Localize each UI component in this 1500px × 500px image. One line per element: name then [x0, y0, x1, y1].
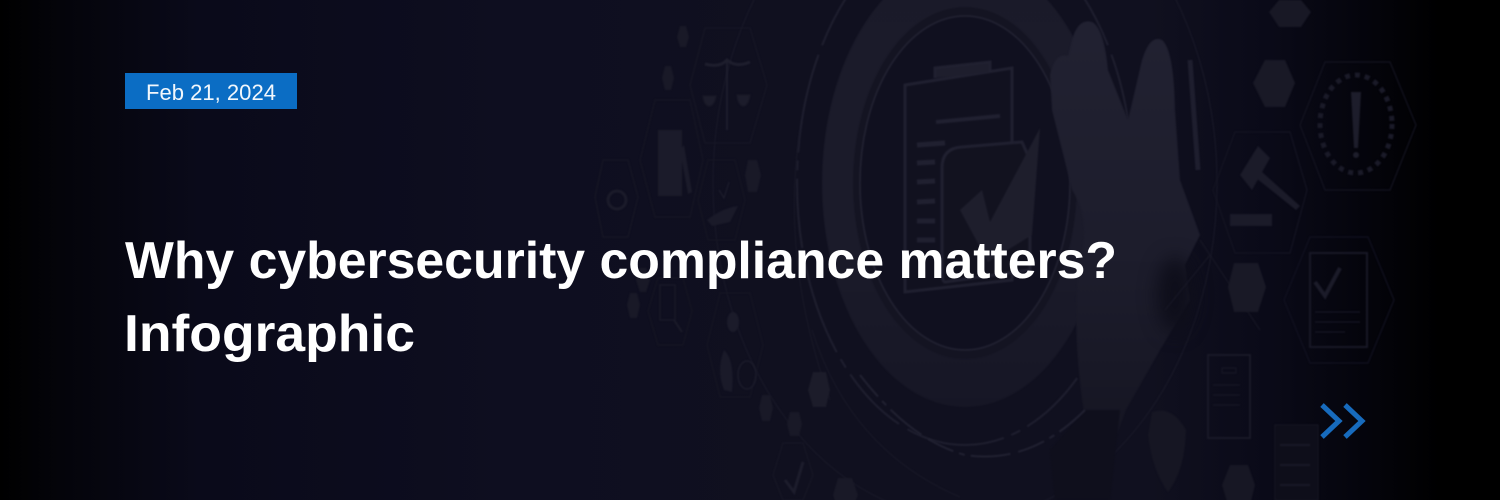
shadow on the hand [1157, 257, 1193, 333]
icon: gavel [1213, 132, 1307, 253]
date badge: Feb 21, 2024 [146, 80, 276, 105]
icon: double chevron arrow [1322, 405, 1362, 437]
icon: clipboard with check mark [905, 62, 1040, 292]
icon: head with question mark [1148, 410, 1186, 492]
icon: document [1208, 355, 1250, 438]
background: central rings [713, 0, 1217, 500]
icon group: right hexagon icons [1148, 0, 1416, 500]
icon: handshake check [698, 160, 745, 240]
icon: hand [1050, 21, 1200, 500]
icon: scales of justice [690, 28, 767, 143]
icon: gear [595, 160, 638, 237]
icon: magnifier [648, 278, 692, 345]
title: Infographic [124, 305, 415, 363]
icon: bottom check [773, 443, 813, 500]
icon: warning gear [1300, 62, 1416, 190]
icon: books [640, 100, 703, 217]
small hexagon dots [627, 26, 858, 500]
title [124, 232, 1117, 363]
icon group: left hexagon icons [595, 26, 858, 500]
title: Why cybersecurity compliance matters? [125, 232, 1117, 290]
icon: checklist [1275, 425, 1318, 500]
icon: person with check [707, 293, 763, 397]
icon: clipboard check [1284, 237, 1394, 363]
background: lower dashed arc [794, 60, 1260, 497]
date badge [125, 73, 297, 109]
